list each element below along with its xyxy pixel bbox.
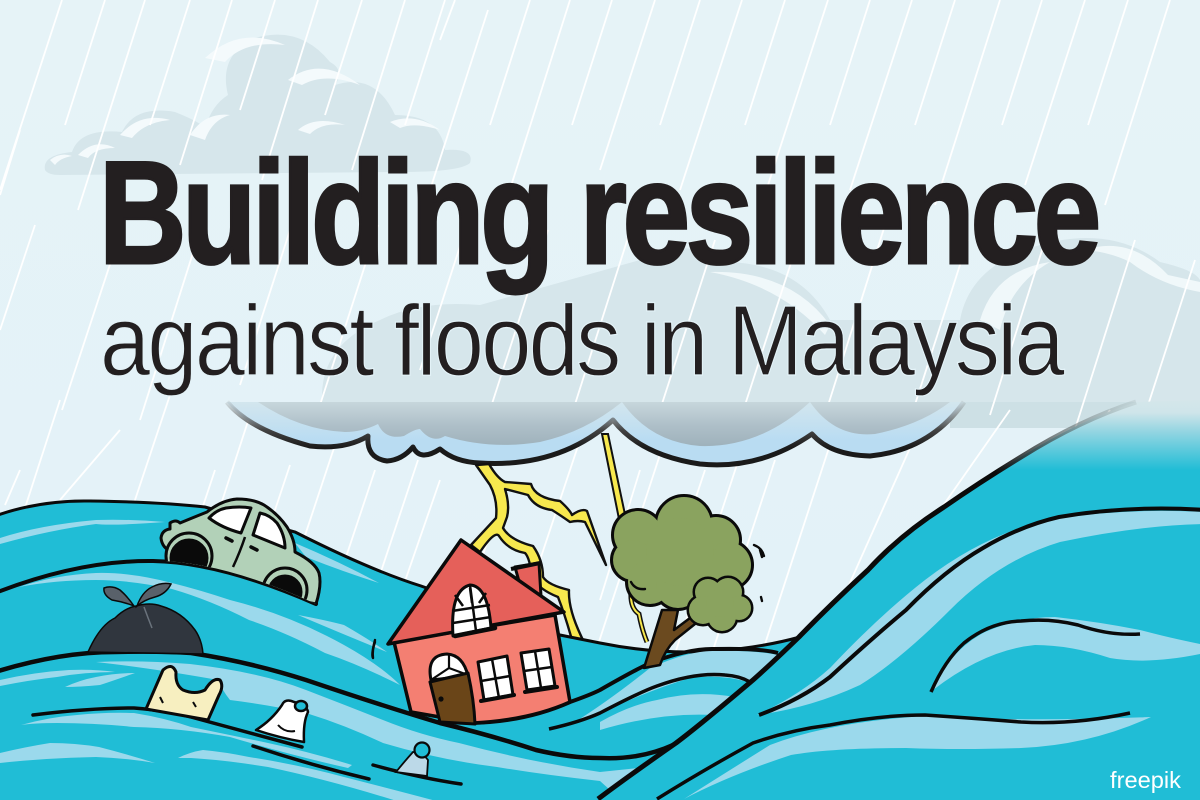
background cloud: right [322,238,1200,428]
flood wave: back [0,501,800,800]
flood wave: third crest line [0,652,673,758]
background cloud: upper left [45,35,471,175]
credit: freepik [1110,767,1182,793]
tree [613,497,764,668]
wave crest with highlight: upper right [757,509,1200,715]
car [161,499,320,612]
subtitle: against floods in Malaysia [100,285,1065,397]
lightning bolt: second [602,434,647,642]
tied bag in water [396,742,430,776]
small wave crest at centre [470,649,778,730]
wave crest with highlight: lower right [657,713,1151,799]
highlights: back wave [0,520,379,583]
teal water between crests [0,652,673,800]
plastic bag [146,666,222,720]
big right wave [595,400,1200,800]
storm cloud [227,402,964,465]
flood wave: second crest [0,561,400,685]
plastic bottle [256,701,308,742]
lightning bolt: main [471,464,606,640]
big right wave outline [598,402,1136,799]
rubbish bag [88,583,203,654]
flood wave: foreground lines [33,708,461,784]
wave crest with highlight: middle right [931,617,1200,692]
highlights: lower water [0,661,638,800]
house [372,540,570,724]
